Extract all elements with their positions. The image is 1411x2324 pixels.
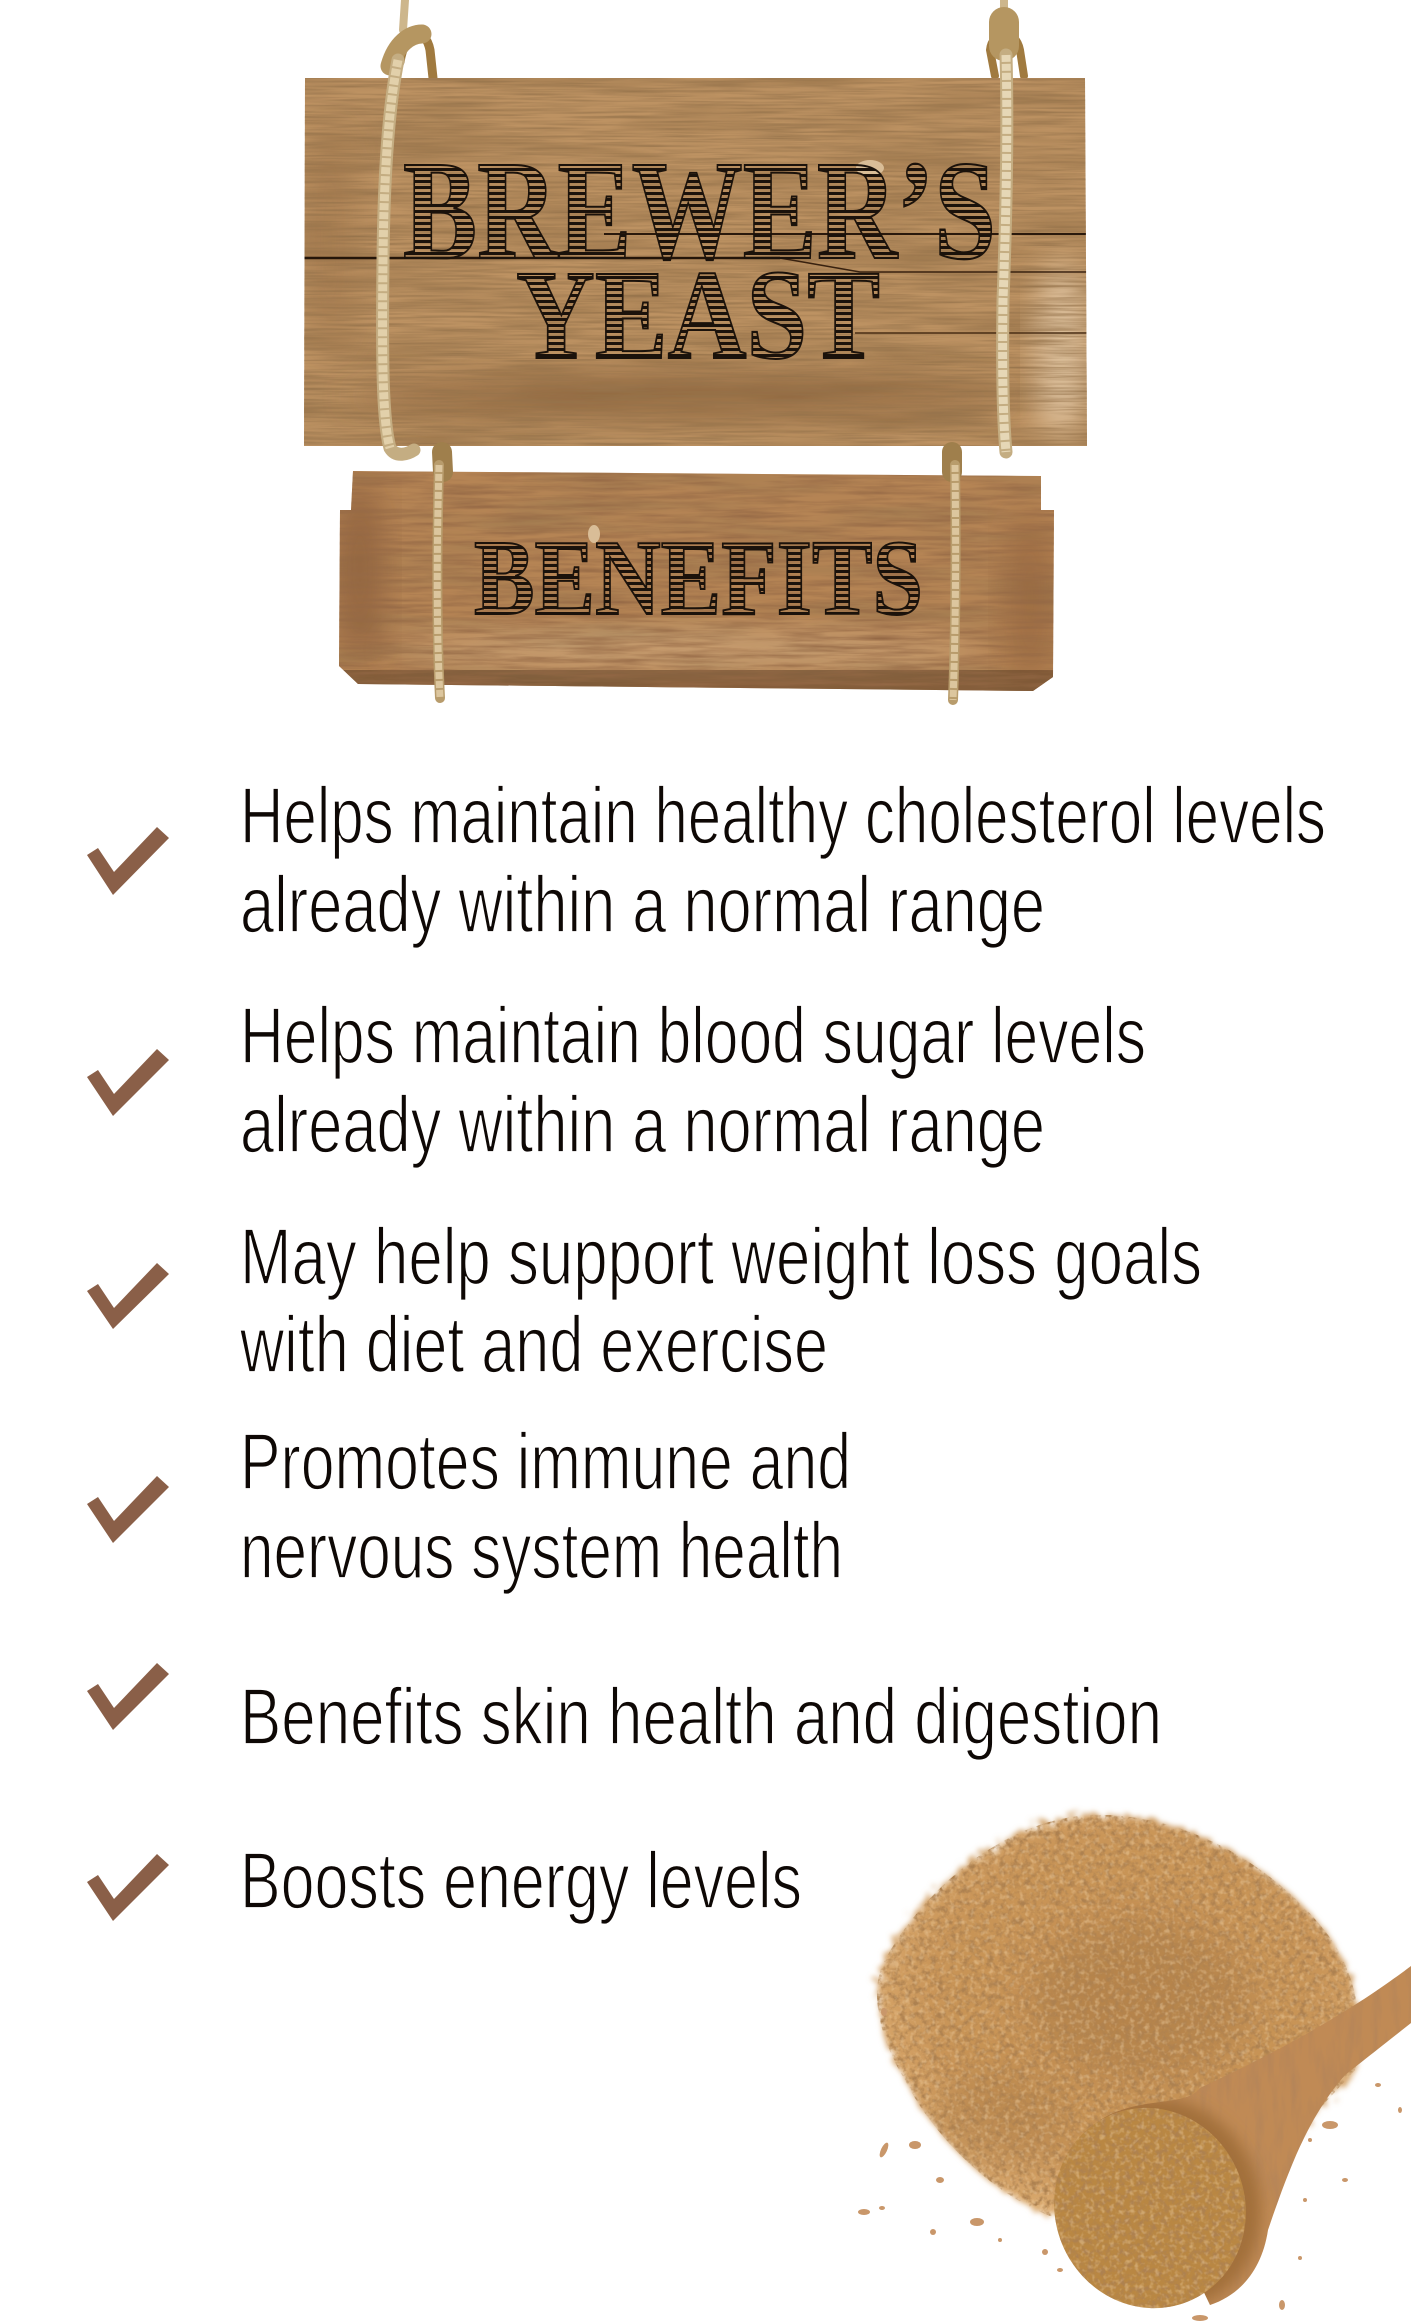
rope: upper hanging knots [390, 0, 1024, 78]
heading: Brewer's: BREWER’S [403, 131, 996, 289]
icon: check mark [87, 1476, 169, 1543]
powder in spoon [1054, 2108, 1246, 2308]
benefit 2 [87, 991, 1146, 1169]
text: immune and nervous system [240, 1417, 851, 1595]
benefit 4 [87, 1417, 851, 1595]
benefit 1 [87, 771, 1326, 949]
icon: check mark [87, 1854, 169, 1921]
heading: Yeast: YEAST [516, 244, 880, 386]
benefit 3 [87, 1212, 1202, 1389]
benefit 5 [87, 1663, 1162, 1761]
wooden spoon [1100, 1966, 1411, 2305]
text: weight loss goals [239, 1212, 1202, 1389]
panel: small wooden sign [334, 468, 1060, 696]
text: blood sugar levels: already within a normal range [240, 1080, 1045, 1169]
text: blood sugar levels [240, 991, 1146, 1169]
text: immune and nervous system: nervous system health [240, 1506, 843, 1595]
text: cholesterol levels: already within a normal range [240, 860, 1045, 949]
illustration: yeast powder pile and spoon [858, 1805, 1411, 2324]
icon: check mark [87, 1049, 169, 1116]
rope: small sign right [952, 452, 956, 700]
text: weight loss goals: with diet and exercise [239, 1300, 828, 1389]
icon: check mark [87, 1663, 169, 1730]
text: blood sugar levels: Helps maintain blood sugar levels [240, 991, 1146, 1080]
icon: check mark [87, 1263, 169, 1329]
text: energy levels: Boosts energy levels [240, 1836, 802, 1925]
powder pile [860, 1805, 1370, 2225]
text: cholesterol levels [240, 771, 1326, 949]
scattered crumbs [858, 2008, 1402, 2321]
rope: large sign left [383, 60, 414, 454]
text: skin health and digestion: Benefits skin health and digestion [240, 1672, 1162, 1761]
text: immune and nervous system: Promotes immune and [240, 1417, 851, 1506]
panel: large wooden sign [300, 74, 1092, 450]
icon: check mark [87, 827, 169, 895]
benefit 6 [87, 1836, 802, 1925]
rope: large sign right [1003, 55, 1007, 452]
rope: small sign left [437, 452, 443, 698]
heading: Benefits: BENEFITS [474, 519, 923, 638]
